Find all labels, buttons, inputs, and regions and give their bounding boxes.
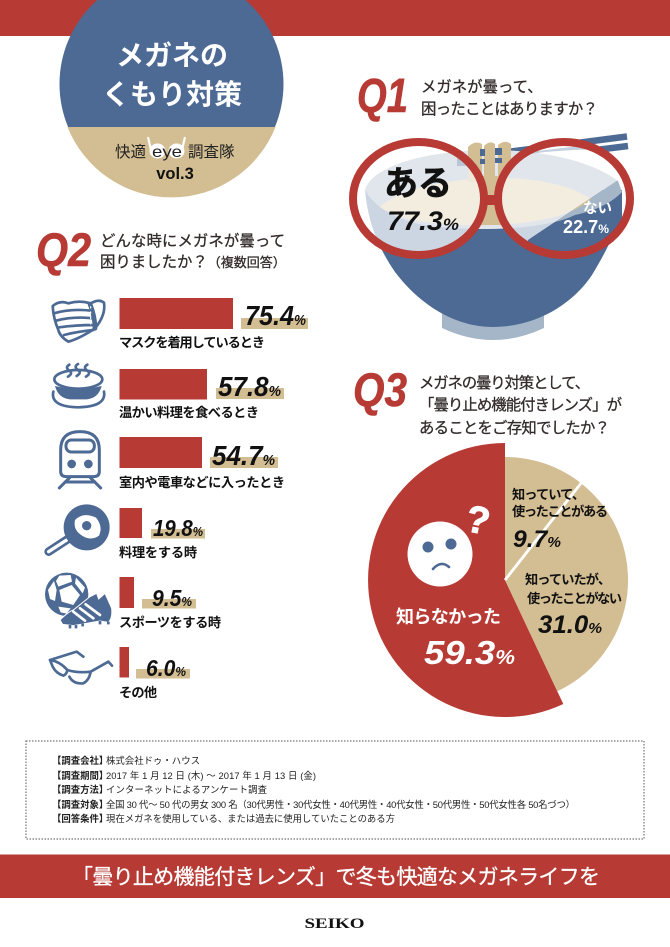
- row: other: 6.0%: [146, 655, 186, 681]
- icon: red glasses: [353, 142, 630, 255]
- row: train: 54.7%: [212, 440, 275, 471]
- answer: no: ない: [583, 200, 612, 217]
- icon: frying pan: [49, 504, 110, 552]
- subtitle with glasses: 快適: [115, 143, 146, 161]
- row: sports: スポーツをする時: [119, 614, 221, 630]
- survey notes: 現在メガネを使用している、または過去に使用していたことのある方: [106, 813, 395, 824]
- answer: yes: 77.3%: [387, 206, 459, 236]
- answer: no: 22.7%: [563, 217, 609, 237]
- label: did not know: [396, 607, 515, 671]
- left lens fog: [365, 158, 480, 251]
- label: knew but not used: 知っていたが、: [525, 571, 611, 587]
- row: cooking: [49, 504, 205, 560]
- header band: [0, 0, 670, 36]
- row: other: その他: [119, 685, 157, 700]
- Q1 ramen bowl with glasses chart: [349, 136, 634, 340]
- row: train: 室内や電車などに入ったとき: [119, 474, 285, 490]
- row: mask: マスクを着用しているとき: [119, 335, 265, 350]
- survey notes: 全国 30 代～ 50 代の男女 300 名（30代男性・30代女性・40代男性・40代女性・50代男性・50代女性各 50名づつ）: [106, 799, 575, 810]
- answer: no: [563, 200, 612, 237]
- title: [102, 40, 242, 110]
- Q3 heading: [353, 363, 622, 437]
- answer: yes: [384, 165, 459, 236]
- row: hot food: 57.8%: [218, 371, 281, 402]
- label: knew and used: 使ったことがある: [512, 503, 608, 519]
- Q2 heading: Q2: [36, 223, 91, 276]
- survey notes: 【回答条件】: [52, 813, 108, 824]
- Q3 heading: 「曇り止め機能付きレンズ」が: [419, 396, 622, 414]
- survey notes: 【調査会社】: [52, 755, 108, 766]
- label: did not know: 知らなかった: [396, 607, 501, 627]
- slice: knew: [505, 457, 628, 691]
- icon: chopsticks: [500, 136, 628, 162]
- Q3 pie chart: [368, 443, 628, 717]
- icon: train: [59, 432, 101, 488]
- row: sports: 9.5%: [152, 585, 192, 611]
- title: くもり対策: [102, 79, 242, 110]
- icon: worried face: [408, 498, 494, 586]
- label: knew but not used: [525, 571, 622, 639]
- Q3 heading: メガネの曇り対策として、: [419, 374, 590, 392]
- icon: soccer ball and shoe: [45, 573, 112, 628]
- survey notes: インターネットによるアンケート調査: [106, 784, 268, 795]
- subtitle with glasses: vol.3: [156, 165, 194, 183]
- row: mask: [53, 298, 308, 350]
- Q1 heading: [357, 70, 598, 123]
- row: hot food: [53, 364, 284, 420]
- Q3 heading: Q3: [353, 363, 407, 416]
- Q2 heading: [36, 223, 286, 276]
- answer: yes: ある: [384, 165, 452, 203]
- SEIKO logo: SEIKO: [304, 916, 364, 932]
- Q1 heading: メガネが曇って、: [421, 78, 543, 96]
- survey notes: 2017 年 1 月 12 日 (木) ～ 2017 年 1 月 13 日 (金): [106, 770, 316, 781]
- survey notes: 株式会社ドゥ・ハウス: [106, 755, 200, 766]
- row: other: [50, 647, 190, 700]
- row: cooking: 19.8%: [153, 515, 203, 541]
- survey notes: 【調査対象】: [52, 799, 108, 810]
- row: train: [59, 432, 285, 490]
- label: did not know: 59.3 %: [424, 634, 515, 671]
- subtitle with glasses: eye: [152, 144, 182, 161]
- row: sports: [45, 573, 221, 630]
- label: knew and used: [512, 487, 608, 553]
- row: cooking: 料理をする時: [119, 544, 197, 560]
- slice: did not know: [368, 443, 563, 717]
- icon: bowl: [365, 142, 622, 340]
- icon: hot bowl: [53, 364, 104, 407]
- title: メガネの: [116, 40, 228, 71]
- Q1 heading: 困ったことはありますか？: [421, 100, 598, 118]
- survey notes: 【調査期間】: [52, 770, 108, 781]
- row: mask: 75.4%: [245, 300, 306, 331]
- Q3 heading: あることをご存知でしたか？: [419, 419, 610, 437]
- title badge: [60, 0, 284, 197]
- survey notes: [26, 741, 644, 839]
- footer band: 「曇り止め機能付きレンズ」で冬も快適なメガネライフを: [72, 866, 600, 889]
- footer band: [0, 854, 670, 898]
- label: knew but not used: 31.0%: [538, 611, 602, 639]
- label: knew and used: 知っていて、: [512, 487, 585, 502]
- icon: chopsticks seen through noodles: [480, 148, 502, 164]
- Q2 heading: 困りましたか？（複数回答）: [100, 253, 286, 271]
- Q2 heading: どんな時にメガネが曇って: [100, 232, 285, 250]
- icon: mask: [53, 301, 104, 342]
- right lens fog and clear split: [502, 146, 622, 241]
- survey notes: 【調査方法】: [52, 784, 108, 795]
- Q1 heading: Q1: [357, 70, 408, 123]
- icon: glasses: [50, 652, 112, 683]
- bar chart: [45, 298, 308, 700]
- label: knew and used: 9.7%: [513, 526, 561, 553]
- icon: worried face: ?: [462, 498, 494, 544]
- subtitle with glasses: [115, 137, 235, 183]
- row: hot food: 温かい料理を食べるとき: [119, 404, 259, 420]
- subtitle with glasses: 調査隊: [188, 143, 235, 161]
- label: knew but not used: 使ったことがない: [527, 590, 622, 606]
